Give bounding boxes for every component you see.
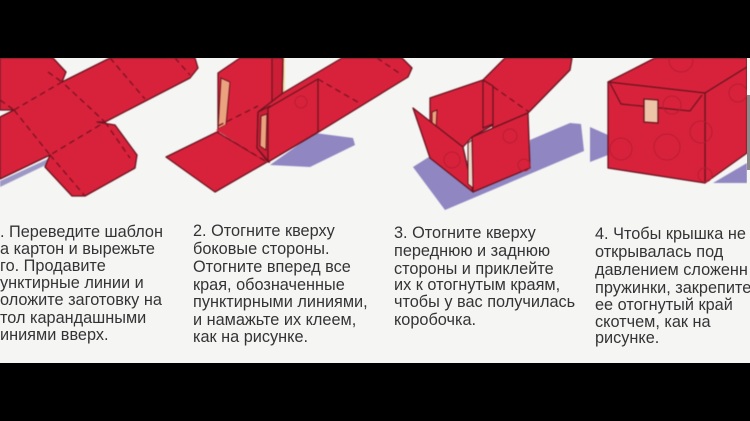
- illustration 4: closed box with tape: [590, 48, 747, 183]
- text: step 2: боковые стороны.: [193, 240, 329, 258]
- text: step 3: их к отогнутым краям,: [394, 276, 560, 294]
- illustration 3: assembled open box: [413, 58, 584, 210]
- text: step 2: Отогните вперед все: [193, 258, 351, 276]
- text: step 4: открывалась под: [595, 243, 724, 261]
- text: step 2: [193, 222, 368, 346]
- shadow: [590, 127, 747, 183]
- text: step 4: 4. Чтобы крышка не: [595, 225, 746, 243]
- text: step 1: иниями вверх.: [0, 326, 109, 344]
- text: step 1: тол карандашными: [0, 309, 146, 327]
- text: step 1: оложите заготовку на: [0, 291, 163, 309]
- illustrations: [0, 48, 747, 210]
- right edge strip: [747, 95, 750, 170]
- text: step 4: рисунке.: [595, 329, 659, 347]
- text: step 4: давлением сложенн: [595, 261, 748, 279]
- text: step 4: [595, 225, 750, 347]
- text: step 1: а картон и вырежьте: [0, 240, 155, 258]
- page background: [0, 58, 750, 363]
- text: step 3: [394, 224, 575, 329]
- text: step 3: коробочка.: [394, 311, 476, 329]
- text: step 2: края, обозначенные: [193, 276, 345, 294]
- shadow: [270, 133, 355, 167]
- text: step 1: . Переведите шаблон: [0, 223, 163, 241]
- text: step 4: ее отогнутый край: [595, 296, 733, 314]
- illustration 2: side walls folded up: [166, 58, 412, 192]
- text: step 2: 2. Отогните кверху: [193, 222, 336, 240]
- text: step 3: чтобы у вас получилась: [394, 293, 575, 311]
- text: step 2: как на рисунке.: [193, 328, 308, 346]
- text: step 2: пунктирными линиями,: [193, 293, 368, 311]
- illustration 1: flat box template: [0, 58, 198, 196]
- shadow: [413, 123, 584, 210]
- text: step 3: 3. Отогните кверху: [394, 224, 537, 242]
- text: step 3: стороны и приклейте: [394, 260, 554, 278]
- text: step 2: и намажьте их клеем,: [193, 311, 356, 329]
- text: step 4: пружинки, закрепите: [595, 279, 750, 297]
- text: step 1: го. Продавите: [0, 257, 106, 275]
- text: step 3: переднюю и заднюю: [394, 242, 550, 260]
- text: step 1: [0, 223, 163, 344]
- text: step 4: скотчем, как на: [595, 313, 712, 331]
- text: step 1: унктирные линии и: [0, 274, 144, 292]
- tape: [644, 99, 658, 123]
